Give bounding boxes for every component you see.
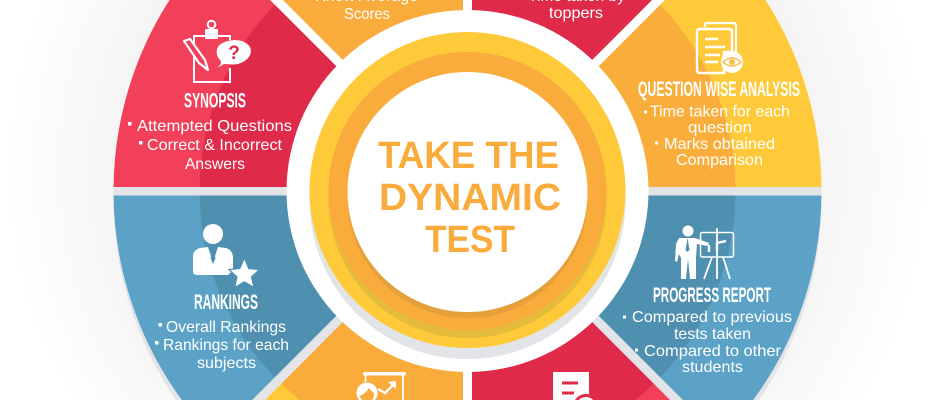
text block: synopsis items: Attempted Questions	[137, 118, 292, 135]
center badge: take the dynamic test	[286, 10, 648, 372]
heading: synopsis: SYNOPSIS	[184, 90, 246, 112]
icon: person with star	[193, 224, 260, 288]
panel: rankings	[114, 191, 468, 400]
panel: synopsis	[114, 0, 468, 191]
text block: progress items: Compared to previous	[632, 309, 792, 326]
panel: question wise analysis	[468, 0, 822, 191]
text block: progress items: tests taken	[674, 326, 751, 343]
text block: question analysis items: Time taken for each	[650, 104, 790, 121]
text block: progress items: students	[682, 359, 743, 376]
text block: question analysis items	[644, 104, 790, 169]
text block: toppers	[528, 0, 625, 22]
text block: synopsis items: Correct & Incorrect	[147, 137, 283, 154]
panel: time taken by toppers	[468, 0, 658, 191]
text block: synopsis items	[128, 118, 292, 173]
text block: average scores	[315, 0, 418, 23]
text block: rankings items: Rankings for each	[163, 337, 289, 354]
title text: TAKE THE	[378, 135, 559, 177]
title text: DYNAMIC	[379, 177, 561, 219]
heading: progress report: PROGRESS REPORT	[653, 284, 771, 307]
panel: progress report	[468, 191, 822, 400]
icon: documents with eye	[697, 23, 743, 73]
heading: question wise analysis: QUESTION WISE ANALYSIS	[638, 78, 800, 101]
text block: toppers: toppers	[549, 5, 603, 22]
text block: progress items: Compared to other	[644, 343, 782, 360]
title text	[378, 135, 561, 261]
icon: clipboard with question bubble	[184, 21, 251, 82]
text block: average scores: Scores	[344, 6, 390, 23]
text block: synopsis items: Answers	[185, 156, 245, 173]
panel: know average scores	[276, 0, 468, 191]
icon: document with magnifier	[553, 372, 597, 400]
text block: progress items	[623, 309, 792, 376]
icon: clipboard with question bubble: ?	[228, 43, 240, 64]
panel: bottom orange	[258, 191, 468, 400]
text block: rankings items	[155, 319, 289, 372]
text block: rankings items: Overall Rankings	[166, 319, 286, 336]
text block: rankings items: subjects	[197, 355, 256, 372]
text block: question analysis items: question	[688, 120, 752, 137]
title text: TEST	[425, 219, 515, 261]
heading: rankings: RANKINGS	[194, 291, 258, 314]
panel: bottom red	[468, 191, 676, 400]
text block: question analysis items: Comparison	[676, 152, 763, 169]
icon: teacher with arrow board	[356, 372, 406, 400]
text block: question analysis items: Marks obtained	[664, 136, 775, 153]
icon: presenter with chart board	[675, 226, 734, 279]
